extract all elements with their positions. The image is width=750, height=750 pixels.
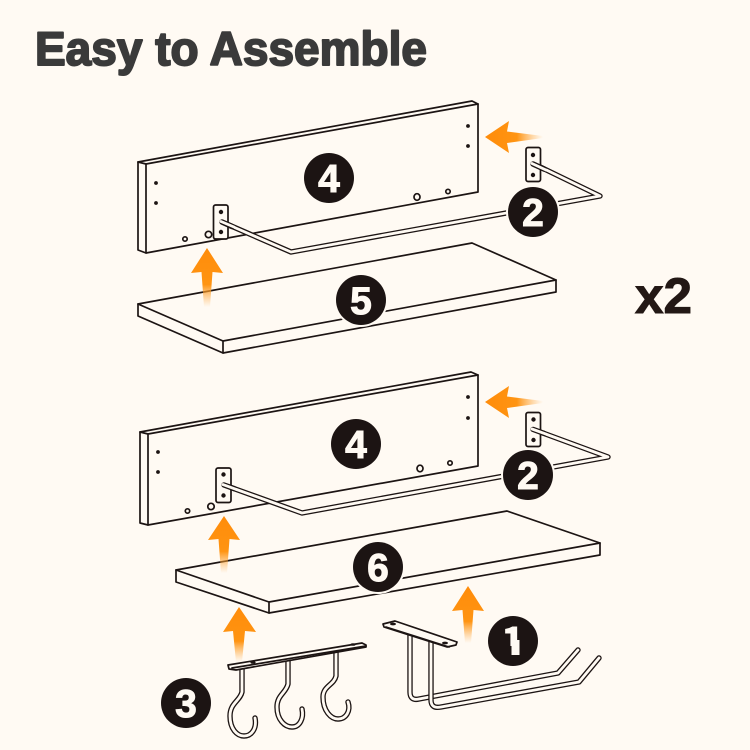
badge 6: 6 xyxy=(367,547,389,590)
arrow: towel bar up xyxy=(452,586,484,643)
hooks xyxy=(230,652,349,736)
top wire rod xyxy=(222,163,600,252)
arrow: hook rack up xyxy=(223,607,256,662)
arrow: top left up xyxy=(191,248,223,307)
towel bar part 1 xyxy=(383,621,599,707)
badge 5 xyxy=(336,275,386,325)
hook rack part 3 xyxy=(228,643,366,736)
shelf 5 xyxy=(138,243,556,353)
badge 2 lower xyxy=(503,450,553,500)
badge 1 xyxy=(488,611,538,667)
left bracket plate xyxy=(214,205,234,239)
badge 5: 5 xyxy=(350,280,372,323)
lower back panel xyxy=(140,372,478,525)
badge 2 lower: 2 xyxy=(517,455,539,498)
towel bar mounting plate xyxy=(383,621,457,647)
lower wire rod xyxy=(224,429,608,513)
rods xyxy=(410,632,599,707)
arrow: top right left xyxy=(485,121,543,153)
lower right bracket plate xyxy=(526,412,546,446)
badge 6 xyxy=(353,542,403,592)
badge 2 top xyxy=(508,187,558,237)
shelf 6 xyxy=(176,511,600,613)
badge 3: 3 xyxy=(175,683,197,726)
badge 2 top: 2 xyxy=(522,192,544,235)
right bracket plate xyxy=(526,148,546,182)
title: Easy to Assemble xyxy=(35,22,427,75)
arrow: lower left up xyxy=(208,516,240,573)
badge 4 top xyxy=(304,153,354,203)
top assembly xyxy=(138,101,600,353)
top back panel xyxy=(138,101,478,253)
badge 4 lower xyxy=(331,419,381,469)
badge 1: 1 xyxy=(501,611,525,667)
lower left bracket plate xyxy=(216,468,236,502)
badge 4 lower: 4 xyxy=(345,424,367,467)
bottom assembly xyxy=(140,372,608,613)
hook mounting bar xyxy=(228,643,366,670)
arrow: lower right left xyxy=(485,386,543,418)
multiplier label x2: x2 xyxy=(635,268,692,324)
badge 4 top: 4 xyxy=(318,158,340,201)
badge 3 xyxy=(161,678,211,728)
